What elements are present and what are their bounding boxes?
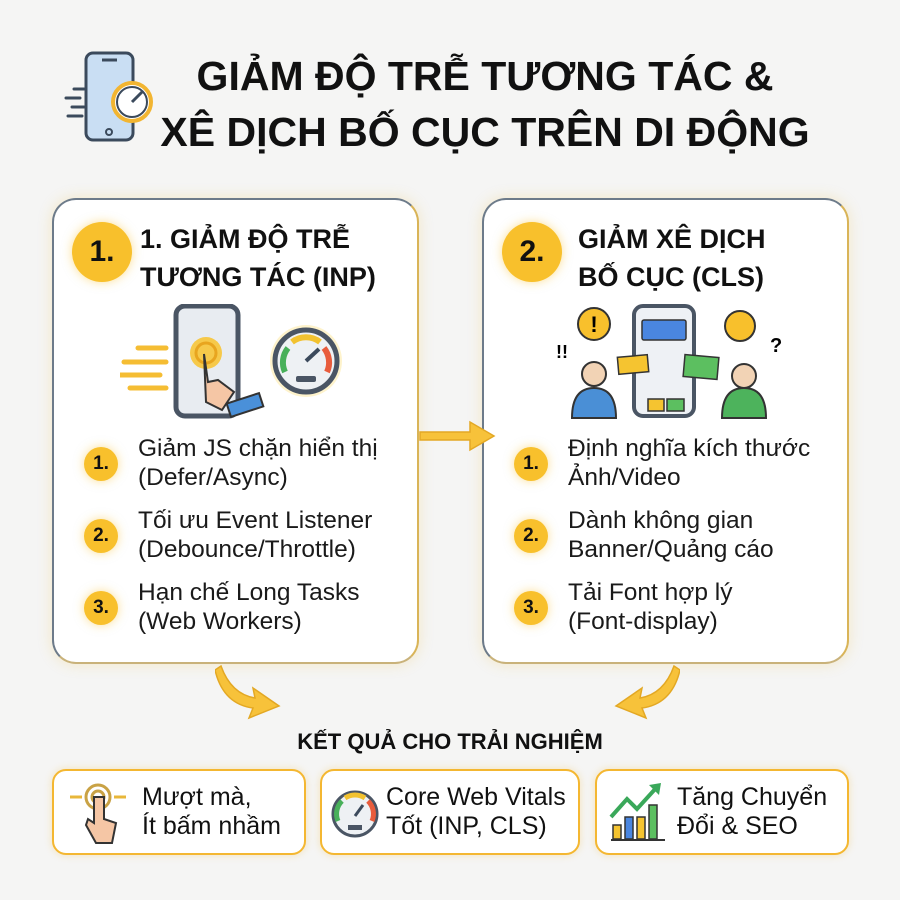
result: conversion & SEO [595,769,849,855]
list item 3: 3. [523,597,539,618]
illustration: tap phone and gauge [120,304,342,418]
illustration: shifting layout: ! [590,312,598,337]
icon: gauge [332,790,378,838]
list item 1: Giảm JS chặn hiển thị [138,435,378,462]
panel: CLS [482,198,849,664]
list item 1 [78,435,378,491]
list item 2 [78,507,372,563]
list item 3: Hạn chế Long Tasks [138,579,360,606]
icon: tap hand [70,784,126,844]
result: smooth: Ít bấm nhầm [142,812,281,840]
icon: growth chart [610,783,665,841]
result: smooth [52,769,306,855]
result: core web vitals [320,769,580,855]
list item 1: 1. [93,453,109,474]
results heading: KẾT QUẢ CHO TRẢI NGHIỆM [297,729,603,754]
list item 2: 2. [523,525,539,546]
arrow: left curved down [215,664,280,720]
list item 3: 3. [93,597,109,618]
list item 3: (Font-display) [568,608,718,635]
result: conversion & SEO: Đổi & SEO [677,812,798,840]
badge 2 [502,222,562,282]
list item 1: (Defer/Async) [138,464,288,491]
list item 2: Tối ưu Event Listener [138,507,372,534]
badge 1 [72,222,132,282]
list item 3 [78,579,360,635]
arrow: right curved down [614,664,680,720]
list item 1 [508,435,810,491]
list item 2: 2. [93,525,109,546]
list item 3: Tải Font hợp lý [568,579,732,606]
result: conversion & SEO: Tăng Chuyển [677,783,827,811]
badge 2: 2. [519,235,545,268]
heading INP: 1. GIẢM ĐỘ TRỄ [140,224,350,254]
illustration: shifting layout: ? [770,335,782,357]
title: XÊ DỊCH BỐ CỤC TRÊN DI ĐỘNG [160,109,810,155]
heading CLS: BỐ CỤC (CLS) [578,262,764,292]
list item 2 [508,507,774,563]
icon: phone with stopwatch [64,52,153,142]
list item 2: (Debounce/Throttle) [138,536,356,563]
result: core web vitals: Tốt (INP, CLS) [386,812,547,840]
heading CLS: GIẢM XÊ DỊCH [578,224,766,254]
illustration: shifting layout: !! [556,342,568,362]
heading CLS [578,224,766,292]
result: core web vitals: Core Web Vitals [386,783,566,811]
list item 3 [508,579,732,635]
list item 2: Banner/Quảng cáo [568,536,774,563]
illustration: shifting layout [556,304,782,419]
title: GIẢM ĐỘ TRỄ TƯƠNG TÁC & [197,53,773,99]
heading INP [140,224,376,292]
list item 3: (Web Workers) [138,608,302,635]
arrow: between panels [419,420,496,452]
list item 2: Dành không gian [568,507,753,534]
list item 1: 1. [523,453,539,474]
heading INP: TƯƠNG TÁC (INP) [140,262,376,292]
title [160,53,810,155]
badge 1: 1. [89,235,115,268]
list item 1: Định nghĩa kích thước [568,435,810,462]
panel: INP [52,198,419,664]
list item 1: Ảnh/Video [568,464,681,491]
result: smooth: Mượt mà, [142,783,252,811]
